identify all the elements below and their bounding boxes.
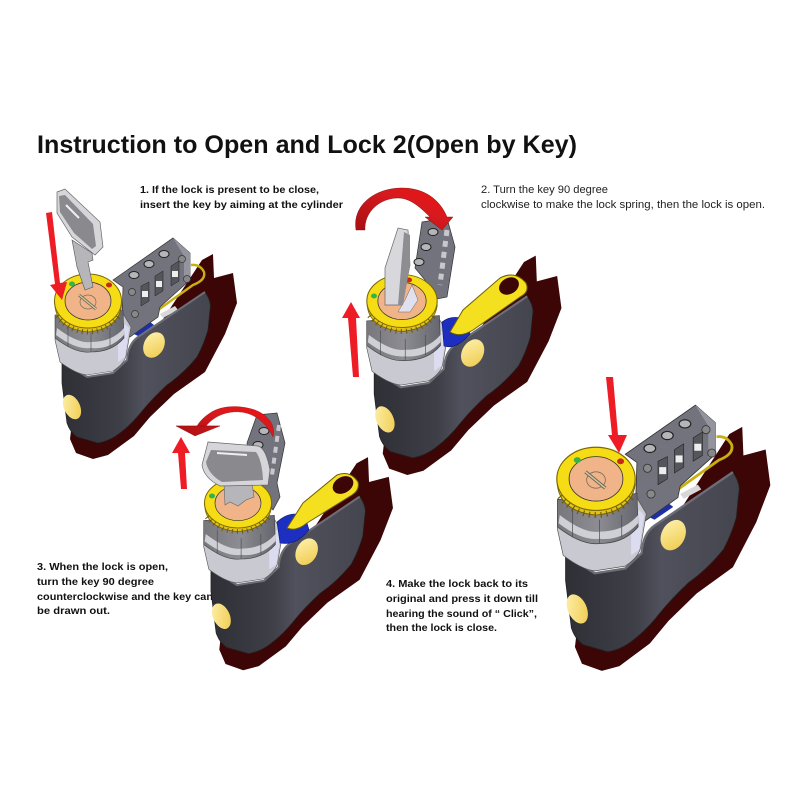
step 1 text: [140, 184, 343, 211]
step 3 text: turn the key 90 degree: [37, 576, 154, 588]
step 3 text: be drawn out.: [37, 605, 110, 617]
step 1 text: insert the key by aiming at the cylinder: [140, 199, 343, 211]
icon: key in figure 1: [57, 189, 103, 290]
step 1 text: 1. If the lock is present to be close,: [140, 184, 319, 196]
arrow: counterclockwise, figure 3: [176, 407, 274, 437]
step 2 text: [481, 184, 765, 211]
icon: key in figure 2: [385, 228, 418, 312]
arrow: clockwise, figure 2: [356, 188, 453, 230]
arrow: down, figure 1: [46, 212, 67, 300]
lock figure 1: key inserted, closed: [54, 189, 237, 459]
arrow: up, figure 2: [342, 302, 360, 377]
strap and blue hook, figure 3: [277, 473, 358, 543]
icon: key in figure 3: [202, 442, 270, 506]
strap and blue hook, figure 2: [442, 274, 527, 347]
step 3 text: [37, 561, 213, 617]
combination block, figure 3: [247, 413, 285, 510]
step 4 text: original and press it down till: [386, 593, 538, 605]
arrow: down, figure 4: [606, 377, 627, 453]
step 3 text: counterclockwise and the key can: [37, 591, 213, 603]
step 4 text: hearing the sound of “ Click”,: [386, 608, 537, 620]
lock figure 2: key turned, open: [367, 218, 561, 475]
step 2 text: 2. Turn the key 90 degree: [481, 184, 608, 196]
lock figure 4: pressed closed: [557, 405, 770, 671]
step 4 text: then the lock is close.: [386, 622, 497, 634]
step 4 text: [386, 578, 538, 634]
combination block, figure 2: [414, 218, 455, 300]
step 2 text: clockwise to make the lock spring, then the lock is open.: [481, 199, 765, 211]
step 4 text: 4. Make the lock back to its: [386, 578, 528, 590]
step 3 text: 3. When the lock is open,: [37, 561, 168, 573]
lock figure 3: key turned back: [202, 413, 393, 670]
title: Instruction to Open and Lock 2(Open by Key): [37, 131, 577, 159]
arrow: up, figure 3: [172, 437, 190, 489]
